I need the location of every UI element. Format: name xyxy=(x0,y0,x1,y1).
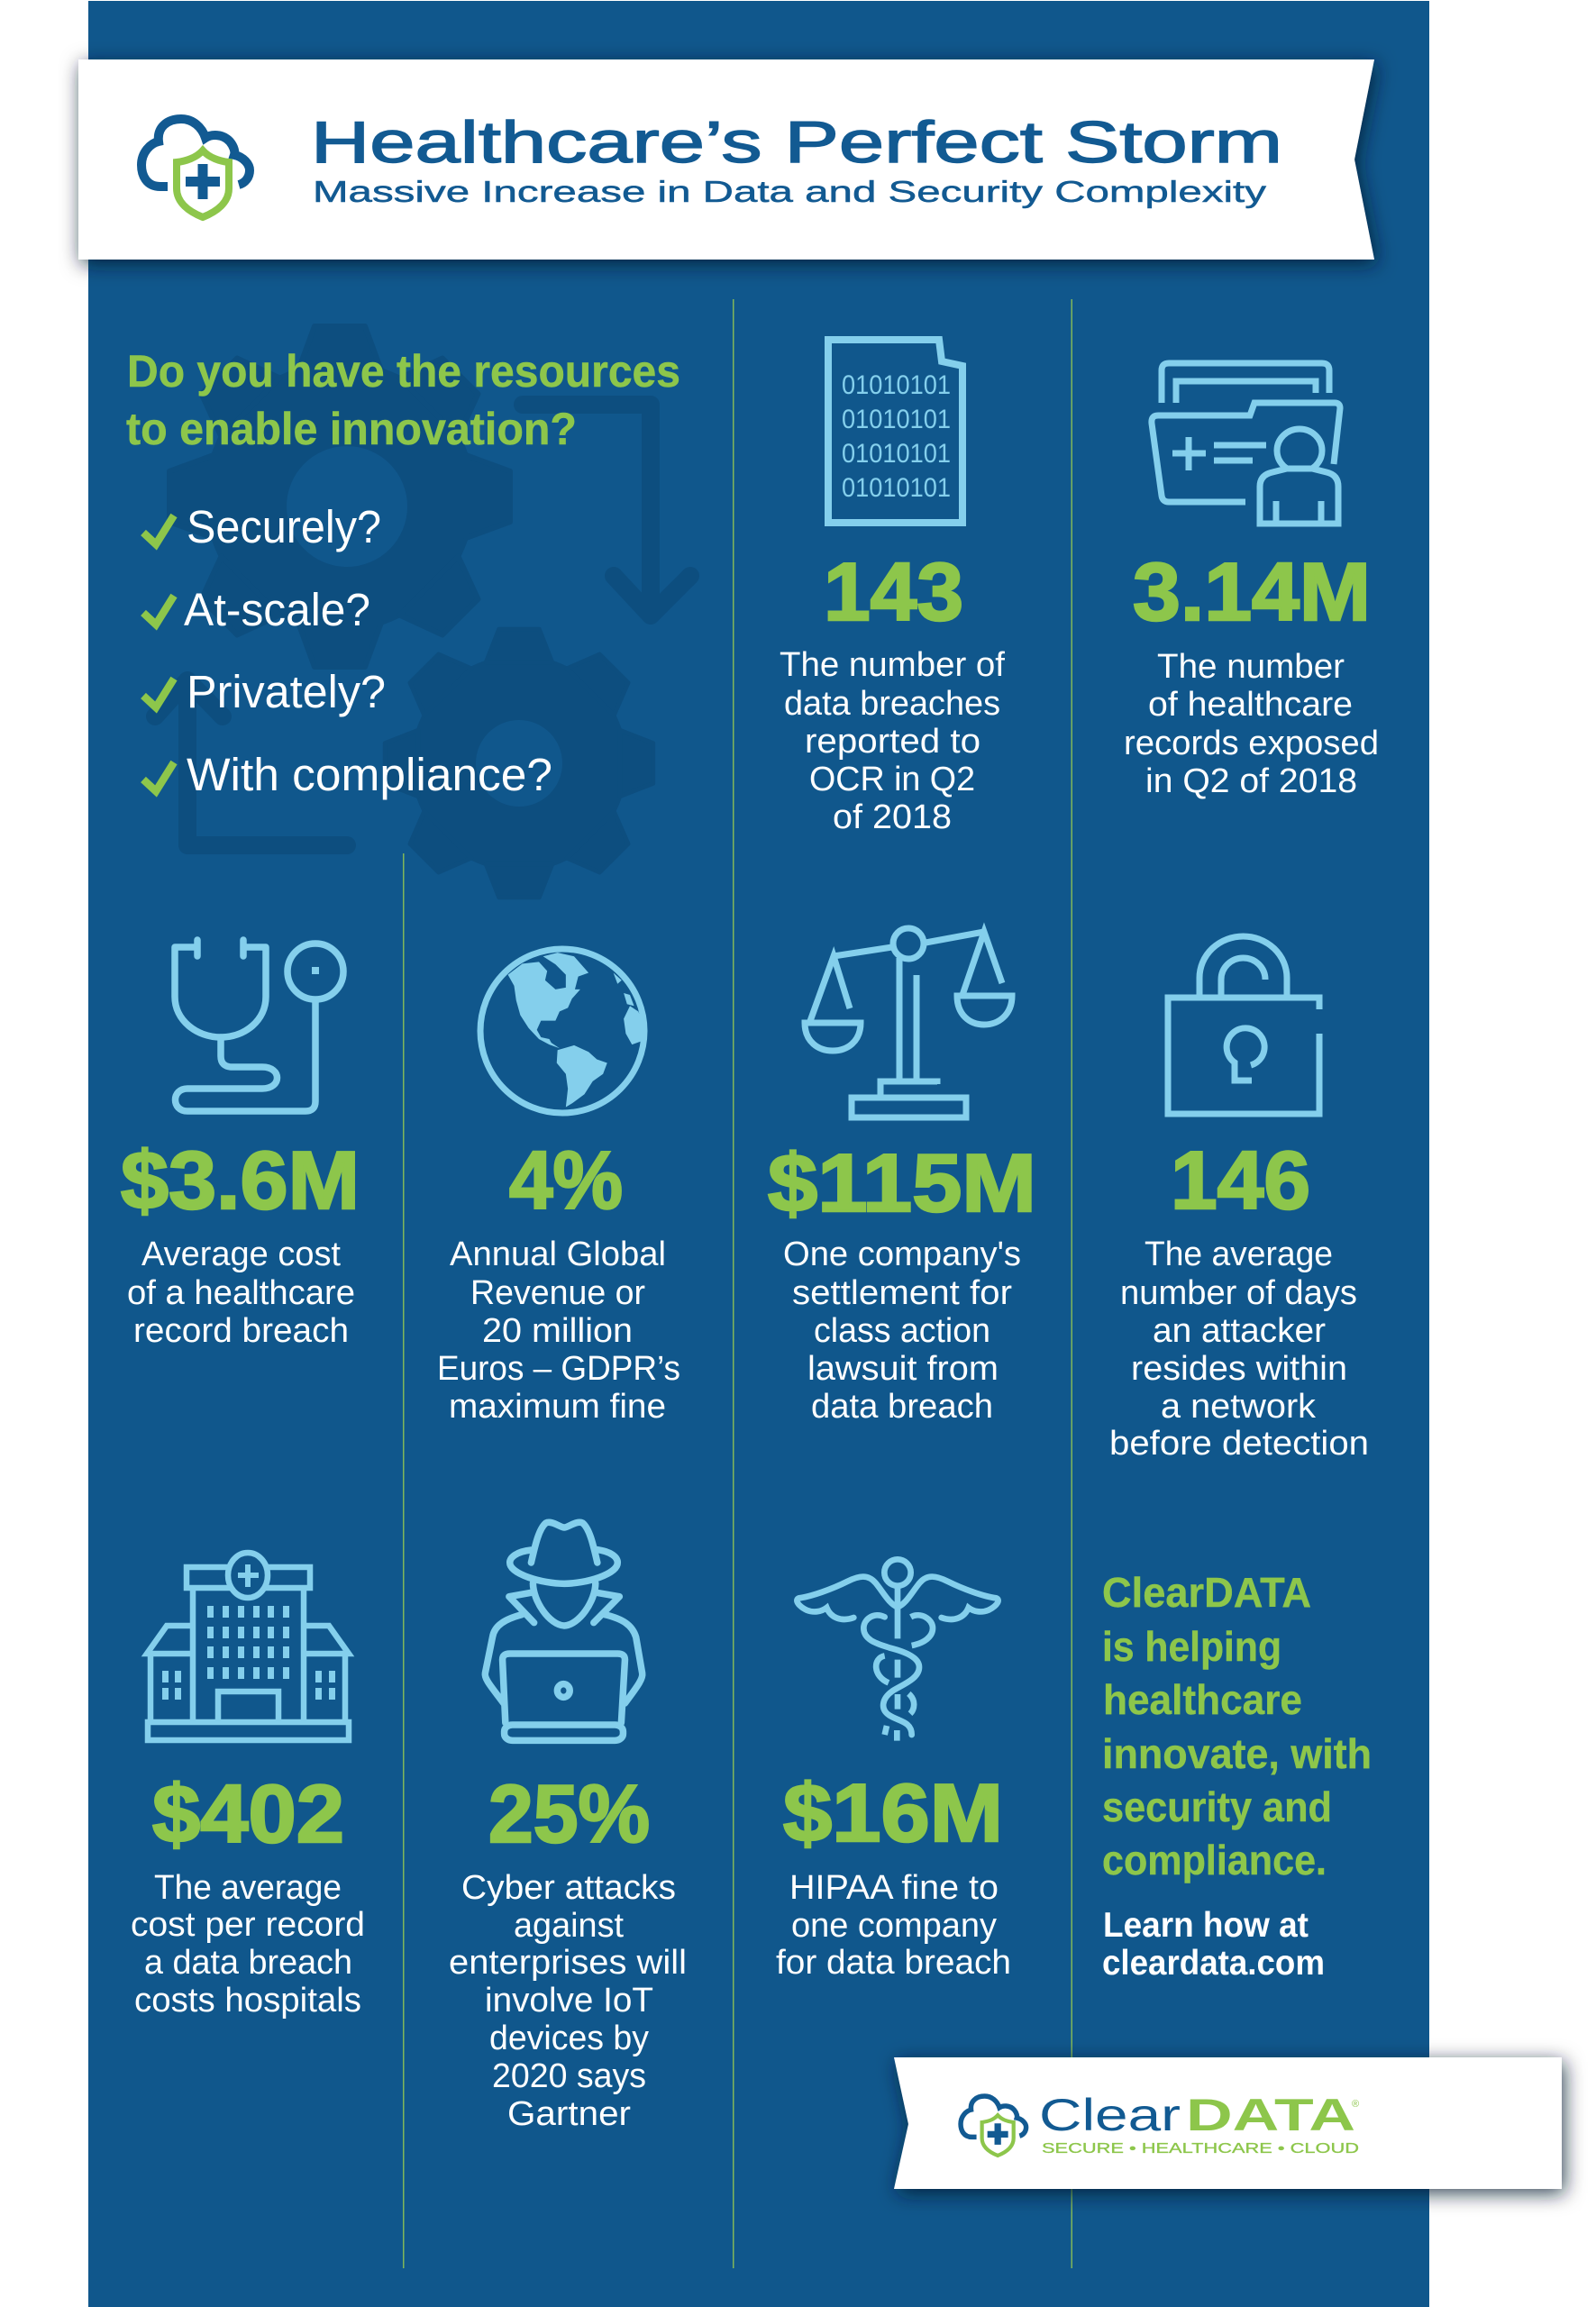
description: before detection xyxy=(1109,1425,1369,1463)
description xyxy=(131,1869,365,2020)
description: Cyber attacks xyxy=(461,1869,676,1907)
description: data breaches xyxy=(784,685,1000,723)
icon: binary document: 01010101 xyxy=(842,370,951,400)
callout: ClearDATA call to action: innovate, with xyxy=(1102,1730,1372,1777)
title: Healthcare’s Perfect Storm xyxy=(311,109,1282,175)
description: OCR in Q2 xyxy=(809,761,975,798)
value: 146 xyxy=(1171,1135,1310,1226)
heading: Do you have the resources xyxy=(127,346,680,397)
stat: 4% GDPR fine xyxy=(437,949,680,1426)
description: The average xyxy=(154,1869,342,1907)
description: HIPAA fine to xyxy=(789,1869,999,1907)
icon: binary document: 01010101 xyxy=(842,405,951,434)
heading xyxy=(126,346,680,454)
value: 3.14M xyxy=(1133,547,1371,638)
icon: binary document: 01010101 xyxy=(842,439,951,469)
description: settlement for xyxy=(792,1274,1012,1312)
description: a network xyxy=(1161,1388,1317,1426)
icon: scales of justice xyxy=(805,928,1012,1117)
checklist item: privately: Privately? xyxy=(187,666,386,717)
icon: hospital xyxy=(147,1553,349,1740)
value: 143 xyxy=(824,547,963,638)
banner: ClearDATA logo xyxy=(894,2057,1562,2189)
logo wordmark xyxy=(1039,2090,1359,2140)
description: in Q2 of 2018 xyxy=(1145,762,1357,800)
description: 2020 says xyxy=(492,2057,646,2095)
icon: stethoscope xyxy=(175,940,343,1111)
description: cost per record xyxy=(131,1906,365,1944)
description xyxy=(783,1236,1021,1426)
checklist item: with compliance: With compliance? xyxy=(187,749,552,800)
icon: hacker with laptop xyxy=(485,1522,643,1740)
description: of healthcare xyxy=(1148,686,1353,724)
description xyxy=(1109,1236,1369,1463)
description: devices by xyxy=(489,2020,649,2057)
icon: cloud shield logo xyxy=(141,119,250,217)
description: class action xyxy=(814,1312,990,1350)
callout: ClearDATA call to action xyxy=(1102,1569,1372,1983)
callout: ClearDATA call to action: cleardata.com xyxy=(1102,1944,1325,1983)
description: records exposed xyxy=(1124,725,1379,762)
description: involve IoT xyxy=(485,1982,653,2020)
description: The number xyxy=(1157,648,1345,686)
stat: $16M HIPAA fine xyxy=(776,1559,1011,1982)
description: maximum fine xyxy=(449,1388,666,1426)
logo wordmark: Clear xyxy=(1039,2090,1181,2140)
logo tagline: SECURE • HEALTHCARE • CLOUD xyxy=(1042,2141,1359,2157)
description xyxy=(437,1236,680,1426)
description: a data breach xyxy=(144,1944,352,1982)
panel: resources question xyxy=(126,346,680,800)
banner: title xyxy=(78,59,1374,260)
description: of 2018 xyxy=(833,798,952,836)
value: 25% xyxy=(488,1769,650,1860)
description: Gartner xyxy=(507,2095,631,2133)
logo wordmark: DATA xyxy=(1186,2090,1355,2140)
callout: ClearDATA call to action: Learn how at xyxy=(1103,1906,1309,1945)
logo wordmark: ® xyxy=(1352,2099,1359,2110)
description: costs hospitals xyxy=(134,1982,361,2020)
description: One company's xyxy=(783,1236,1021,1273)
icon: globe xyxy=(480,949,645,1113)
description: number of days xyxy=(1120,1274,1357,1312)
callout: ClearDATA call to action: compliance. xyxy=(1102,1837,1327,1883)
value: $402 xyxy=(152,1769,344,1860)
stat: $402 per record xyxy=(131,1553,365,2020)
stat: 146 days xyxy=(1109,936,1369,1463)
description xyxy=(449,1869,687,2133)
stat: $115M settlement xyxy=(768,928,1036,1426)
description: reported to xyxy=(805,723,980,761)
description xyxy=(776,1869,1011,1982)
description: record breach xyxy=(133,1312,349,1350)
heading: to enable innovation? xyxy=(126,404,577,454)
description xyxy=(780,646,1005,836)
icon: patient folder xyxy=(1152,363,1340,524)
description: resides within xyxy=(1131,1350,1347,1388)
description: enterprises will xyxy=(449,1944,687,1982)
value: $16M xyxy=(783,1768,1003,1859)
icon: padlock xyxy=(1168,936,1319,1114)
stat: 3.14M records xyxy=(1124,363,1379,800)
icon: binary document xyxy=(828,340,962,523)
description: The average xyxy=(1145,1236,1333,1273)
stat: $3.6M breach cost xyxy=(121,940,360,1350)
subtitle: Massive Increase in Data and Security Complexity xyxy=(313,175,1267,208)
description: data breach xyxy=(811,1388,993,1426)
description xyxy=(1124,648,1379,800)
callout: ClearDATA call to action: security and xyxy=(1102,1783,1332,1830)
stat: 143 data breaches xyxy=(780,340,1005,836)
value: 4% xyxy=(509,1135,623,1226)
checklist item: securely: Securely? xyxy=(187,501,381,552)
stat: 25% IoT attacks xyxy=(449,1522,687,2133)
icon: binary document: 01010101 xyxy=(842,473,951,503)
description: Annual Global xyxy=(450,1236,666,1273)
description: lawsuit from xyxy=(807,1350,999,1388)
description xyxy=(127,1236,355,1350)
icon: cloud shield logo xyxy=(961,2096,1026,2156)
description: Euros – GDPR’s xyxy=(437,1350,680,1388)
callout: ClearDATA call to action: healthcare xyxy=(1103,1676,1302,1723)
description: against xyxy=(514,1907,624,1945)
description: Average cost xyxy=(141,1236,341,1273)
description: for data breach xyxy=(776,1944,1011,1982)
description: of a healthcare xyxy=(127,1274,355,1312)
description: one company xyxy=(791,1907,997,1945)
background: gears and arrows xyxy=(155,326,690,898)
description: Revenue or xyxy=(470,1274,645,1312)
description: an attacker xyxy=(1153,1312,1326,1350)
value: $3.6M xyxy=(121,1135,360,1226)
value: $115M xyxy=(768,1138,1036,1229)
description: The number of xyxy=(780,646,1005,684)
icon: caduceus xyxy=(797,1559,999,1741)
description: 20 million xyxy=(482,1312,633,1350)
callout: ClearDATA call to action: is helping xyxy=(1102,1623,1281,1670)
callout: ClearDATA call to action: ClearDATA xyxy=(1102,1569,1311,1616)
checklist item: at-scale: At-scale? xyxy=(184,584,370,635)
